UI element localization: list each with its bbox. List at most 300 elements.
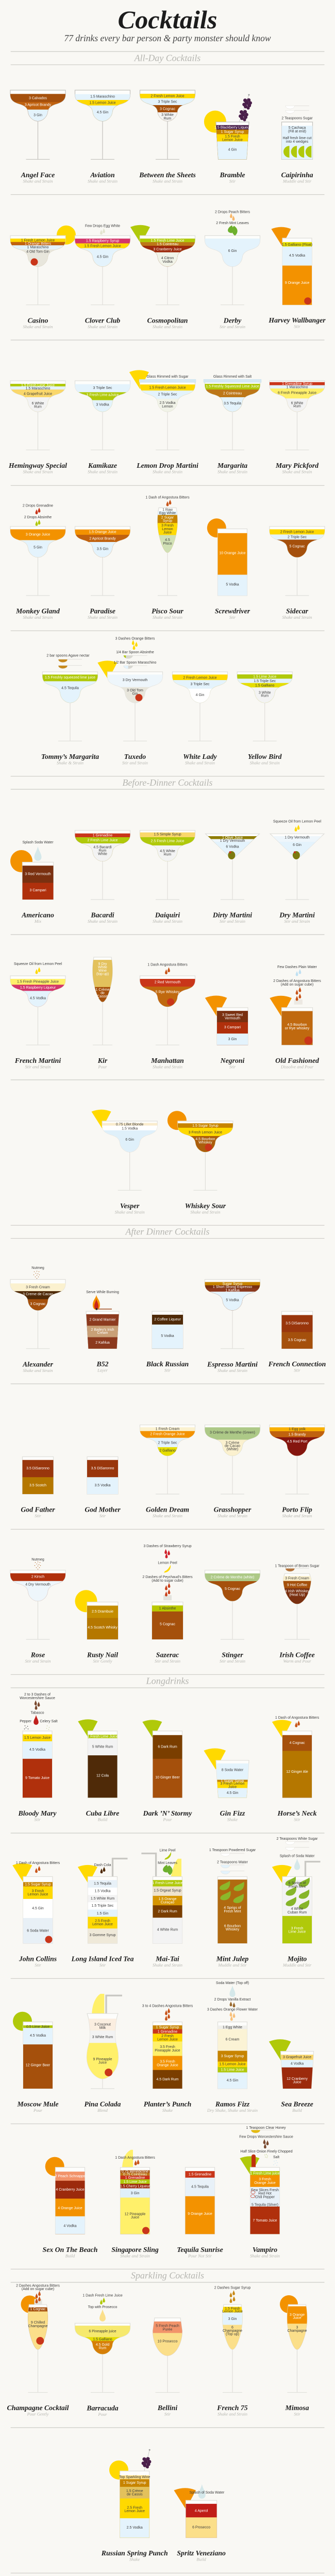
glass: Sea Breeze: 3 Grapefruit Juice [283,2056,311,2059]
glass: Cosmopolitan [139,235,195,305]
glass: Bacardi: 4.5 Bacardi [93,845,112,849]
drink: Hemingway Special [8,380,67,473]
glass: Bacardi: White [98,853,107,856]
name: Americano: Americano [21,911,54,919]
glass: Dirty Martini: 1 Dry Vermouth [220,839,245,843]
garnish: lemon wedge [272,1720,292,1739]
drink: Vesper [92,1110,166,1244]
glass: Dark 'N' Stormy: 6 Dark Rum [158,1745,177,1749]
name: Vampiro [250,2246,280,2258]
name: Mimosa [284,2404,309,2417]
name: Ramos Fizz [207,2100,258,2113]
garnish: lemon oil drops [14,962,62,974]
name: Spritz Veneziano [177,2549,226,2562]
garnish: pineapple slice and straw [92,1994,122,2013]
garnish: angostura drops [145,496,190,506]
name: Whiskey Sour: Whiskey Sour [185,1202,226,1210]
name: Kamikaze: Kamikaze [88,462,117,469]
glass: Tuxedo [99,672,171,801]
drink: Manhattan [131,963,204,1100]
name: Mary Pickford: Mary Pickford [275,462,319,469]
garnish: angostura drops [147,963,188,974]
section heading: Before-Dinner Cocktails: Before-Dinner Cocktails [123,777,212,788]
drink: Daiquiri [131,831,204,959]
name: French Connection [268,1360,326,1373]
garnish: egg white drops [85,224,120,235]
name: Between the Sheets [139,171,196,183]
drink: God Father [2,1457,74,1590]
section heading: All-Day Cocktails [11,52,324,65]
glass: French Connection: 3.5 Cognac [288,1338,307,1342]
glass: French 75: Lemon Juice [222,2310,243,2314]
name: Horse's Neck: Horse’s Neck [277,1809,317,1817]
glass: Manhattan: 2 Red Vermouth [155,980,180,984]
name: Paradise: Paradise [90,607,115,615]
glass: Mimosa: 3 [296,2326,298,2330]
glass: Dry Martini: 1 Dry Vermouth [284,836,310,839]
name: Mimosa: Mimosa [284,2404,309,2412]
glass: Margarita: 3.5 Tequila [224,402,241,405]
name: Stinger: Stinger [222,1651,243,1659]
glass: Pisco Sour: 2 Sugar [161,516,174,519]
name: Russian Spring Punch: Russian Spring Punch [101,2549,168,2557]
glass: Caipirinha: (Fill at end) [288,130,306,133]
glass: Pina Colada [66,2013,139,2156]
glass: Mary Pickford [269,380,325,450]
name: Irish Coffee [279,1651,315,1664]
garnish: nutmeg [31,1266,44,1279]
garnish: angostura drops: 1 Dash of Angostura Bitters [275,1716,320,1720]
garnish: orange wedge [205,996,227,1017]
glass: Tommy's Margarita: 1.5 Freshly squeezed lime juice [45,676,95,680]
name: Pisco Sour [152,607,183,620]
glass: Cosmopolitan: 1.5 Fresh Lime Juice [151,239,185,243]
name: Monkey Gland [15,607,60,620]
glass: Sazerac [131,1602,204,1725]
garnish: straw and lemon wedge [272,1862,321,1884]
garnish: angostura drops: 1 Dash of Angostura Bitters [16,1861,60,1865]
name: Gin Fizz [220,1809,245,1822]
name: Cuba Libre: Cuba Libre [86,1809,119,1817]
glass: Rose: 4 Dry Vermouth [25,1583,51,1587]
garnish: agave spoons: 2 bar spoons Agave nectar [46,654,90,658]
glass: Mary Pickford: 6 White [291,402,303,405]
glass: Sidecar: 2 Fresh Lemon Juice [280,531,314,534]
glass: Long Island Iced Tea: 3 Gomme Syrup [90,1934,116,1937]
glass: Casino: 1 Fresh Lemon Juice [21,239,55,242]
name: Whiskey Sour: Shake and Strain [190,1210,220,1215]
name: Cosmopolitan [147,316,188,329]
name: Sidecar: Sidecar [286,607,309,615]
garnish: honey, worcestershire, onion, salt: Salt [273,2156,279,2159]
glass: Sazerac: 1 Absinthe [159,1607,176,1611]
garnish: grenadine and absinthe drops: 2 Drops Absinthe [24,516,52,519]
glass: Angel Face: 3 Gin [34,114,42,117]
glass: Moscow Mule: 4.5 Vodka [30,2034,46,2038]
name: Screwdriver: Stir [229,615,236,620]
garnish: angostura drops [142,2004,193,2021]
glass: Old Fashioned: 4.5 Bourbon [287,1023,307,1027]
glass: Casino: 1 Orange Bitters [25,242,51,246]
name: Sazerac: Sazerac [156,1651,179,1659]
glass: Mint Julep: Fresh Mint [224,1910,241,1913]
name: Cosmopolitan: Shake and Strain [153,324,182,329]
glass: Clover Club: 1.5 Fresh Lemon Juice [84,244,121,248]
drink: Rose [2,1558,74,1694]
name: Bramble [219,171,245,183]
name: Casino: Shake and Strain [23,324,53,329]
glass: Kir: 9 Dry [98,962,107,966]
garnish: lime wedge [78,1719,97,1738]
glass: Champagne Cocktail: 9 Chilled [31,2321,45,2325]
glass: Ramos Fizz: 6 Cream [226,2038,240,2041]
garnish: bitters, absinthe and maraschino: 1/2 Bar Spoon Maraschino [114,661,157,665]
glass: Whiskey Sour: 3 Fresh Lemon Juice [189,1131,222,1134]
name: Irish Coffee: Warm and Pour [283,1658,311,1664]
glass: French 75: 1.5 Fresh [225,2307,240,2311]
glass: Screwdriver: 5 Vodka [226,583,239,586]
glass: Sazerac: 5 Cognac [160,1623,175,1626]
glass: Bacardi [66,831,139,957]
glass: Stinger: 2 Crème de Menthe (white) [211,1576,254,1580]
name: Pisco Sour: Pisco Sour [152,607,183,615]
name: Golden Dream: Shake and Strain [153,1513,182,1518]
name: Mimosa: Stir [294,2412,300,2417]
garnish: orange slice [167,1111,187,1130]
garnish: lime slice [13,2012,32,2031]
garnish: sugar spoons [281,106,313,121]
glass: Sidecar: 5 Cognac [290,545,305,549]
garnish: honey, worcestershire, onion, salt: Few Drops Worcestershire Sauce [239,2135,293,2139]
name: Vesper: Shake and Strain [115,1210,145,1215]
glass: Irish Coffee [261,1573,333,1702]
garnish: bitters, absinthe and maraschino: 1/4 Bar Spoon Absinthe [116,651,154,654]
garnish: brown sugar spoon: 1 Teaspoon of Brown Sugar [275,1564,320,1568]
garnish: brown sugar spoon [275,1564,320,1571]
glass: Negroni: 3 Gin [228,1038,237,1041]
name: Horse's Neck [277,1809,317,1822]
glass: John Collins: 3 Fresh [32,1890,44,1893]
glass: Between the Sheets [139,90,196,160]
drink: Mai-Tai [131,1849,204,2031]
garnish: angostura drops on sugar cube [16,2284,60,2304]
name: Champagne Cocktail [7,2404,69,2417]
garnish: sugar spoons and soda: 2 Teaspoons White Sugar [276,1837,318,1841]
glass: Porto Flip: 1 Egg yolk [289,1428,306,1431]
name: Bacardi: Bacardi [90,911,114,919]
name: Alexander [22,1360,54,1373]
glass: Bramble: 4 Gin [228,148,237,152]
garnish: worcestershire, tabasco, pepper, celery salt: Tabasco [30,1711,44,1715]
glass: Dark 'N' Stormy: 10 Ginger Beer [155,1776,180,1780]
drink: Yellow Bird [229,672,301,801]
garnish: nutmeg: Nutmeg [31,1266,44,1270]
name: Whiskey Sour [185,1202,226,1215]
name: Daiquiri [153,911,182,924]
garnish: lime drops and prosecco [82,2294,123,2321]
glass: Cosmopolitan: 1.5 Cointreau [157,243,178,246]
glass: Tommy's Margarita [34,672,106,794]
glass: French Martini: 4.5 Vodka [30,997,46,1001]
name: Mai-Tai [153,1955,182,1968]
glass: God Father: 3.5 DiSaronno [26,1467,49,1470]
garnish: orange wedge [270,996,292,1017]
name: Americano: Mix [34,919,41,924]
drink: Americano [2,841,74,996]
glass: Vampiro: 7 Tomato Juice [253,2219,277,2223]
name: Planter's Punch: Shake [162,2108,173,2113]
name: Kir: Pour [98,1064,107,1069]
glass: Daiquiri: Rum [164,853,172,857]
name: Bellini: Bellini [157,2404,177,2412]
name: Paradise: Shake and Strain [88,615,118,620]
name: Sex On The Beach: Build [65,2253,75,2258]
name: White Lady [183,753,217,766]
name: Clover Club: Clover Club [85,316,120,324]
name: Manhattan: Shake and Strain [153,1064,182,1070]
name: Yellow Bird: Yellow Bird [248,753,282,760]
garnish: angostura drops: 1 Dash Angostura Bitters [147,963,188,967]
glass: Mint Julep: 6 Bourbon [224,1925,241,1928]
name: Tommy's Margarita: Shake & Strain [57,760,83,766]
glass: Pina Colada: Juice [98,2061,107,2065]
glass: Cuba Libre: 1 Fresh Lime Juice [87,1735,118,1739]
glass: Screwdriver: 10 Orange Juice [219,551,246,555]
name: Kir [97,1057,108,1069]
glass: Gin Fizz: 8 Soda Water [222,1769,244,1772]
drink: Porto Flip [261,1425,333,1551]
garnish: sugar and water spoons: 2 Teaspoons Water [217,1861,248,1864]
glass: Clover Club: 4.5 Gin [97,255,108,259]
name: French 75: Shake and Strain [217,2412,247,2417]
drink: Pina Colada [66,1994,139,2156]
glass: Vampiro: Chili Pepper [255,2195,275,2199]
drink: Grasshopper [196,1425,269,1553]
glass: Monkey Gland: 5 Gin [34,546,42,549]
glass: Russian Spring Punch: 2.5 Vodka [127,2526,143,2530]
glass: Irish Coffee: 9 Hot Coffee [287,1583,307,1587]
name: Spritz Veneziano: Build [196,2557,207,2562]
garnish: lemon slice and blackberry [109,2449,151,2480]
name: God Father: God Father [21,1505,55,1514]
glass: Vampiro: Orange Juice [254,2181,276,2185]
glass: French 75: (Top up) [226,2333,239,2336]
glass: Golden Dream: 2 Galliano [159,1449,176,1452]
garnish: lemon [57,226,76,245]
glass: Gin Fizz: 1 Sugar Syrup [221,1780,244,1783]
name: Pina Colada: Blend [97,2108,108,2113]
glass: Mojito: 6 Sprigs of [289,1882,306,1885]
glass: Long Island Iced Tea: 1.5 Gin [97,1912,108,1916]
name: Harvey Wallbanger [268,316,326,329]
glass: Singapore Sling: 0.75 Cointreau [123,2173,147,2176]
garnish: lemon oil drops [273,820,322,832]
name: Dark 'N' Stormy [143,1809,192,1822]
glass: Cosmopolitan: 3 Cranberry Juice [153,248,182,251]
glass: Pisco Sour: Lemon [162,528,173,531]
glass: Aviation: 1.5 Maraschino [90,95,115,99]
glass: Manhattan: 5 Rye Whiskey [156,990,180,994]
glass: Aviation: 1.5 Lemon Juice [89,101,116,105]
name: Bacardi: Shake and Strain [88,919,118,924]
drink: Bloody Mary [1,1693,73,1872]
glass: Mai-Tai: 1.5 Orgeat Syrup [154,1889,181,1893]
glass: Mary Pickford: Rum [293,405,301,409]
glass: Between the Sheets: 3 Cognac [160,108,175,111]
garnish: angostura drops on sugar cube: 2 Dashes Angostura Bitters [16,2284,60,2288]
glass: Pisco Sour: 3 Fresh [161,524,174,528]
glass: Pisco Sour [157,507,178,596]
name: Margarita: Shake and Strain [217,469,247,474]
garnish: angostura drops [275,1716,320,1727]
drink: French Connection [261,1311,333,1446]
glass: Singapore Sling: 1.5 Lime Juice [123,2180,147,2184]
garnish: lemon wedge [12,1863,32,1882]
glass: Long Island Iced Tea: 1.5 Triple Sec [92,1904,114,1908]
drink: Dirty Martini [196,834,269,955]
drink: Irish Coffee [261,1564,333,1702]
name: Golden Dream [146,1506,189,1518]
glass: God Father: 3.5 Scotch [29,1484,46,1487]
glass: Angel Face: 3 Apricot Brandy [25,104,52,107]
glass: Stinger: 5 Cognac [225,1587,240,1591]
name: Vampiro: Shake and Strain [250,2253,280,2258]
glass: Golden Dream: 1 Fresh Cream [156,1427,180,1431]
name: Espresso Martini: Espresso Martini [207,1360,258,1368]
name: Vampiro: Vampiro [253,2246,277,2253]
glass: Horse's Neck: 12 Ginger Ale [286,1770,308,1774]
glass: Gin Fizz [196,1760,269,1901]
name: Mint Julep: Muddle and Stir [217,1962,247,1968]
glass: Mary Pickford: 1 Grenadine Syrup [282,382,312,386]
drink: Tequila Sunrise [164,2167,236,2310]
glass: Alexander: 3 Fresh Cream [26,1285,50,1289]
name: French Connection: Stir [294,1368,300,1373]
glass: Cuba Libre: 5 White Rum [92,1745,113,1749]
name: John Collins: John Collins [19,1955,57,1963]
garnish: orange slice [45,2157,64,2176]
name: Dark 'N' Stormy: Dark ’N’ Stormy [143,1809,192,1817]
garnish: straw and pineapple [141,1854,181,1876]
name: Monkey Gland: Monkey Gland [15,607,60,615]
glass: Vampiro: 3 Fresh [259,2178,271,2181]
drink: Cuba Libre [66,1719,139,1869]
drink: Screwdriver [207,518,250,619]
glass: Irish Coffee: 3 Fresh Cream [285,1577,309,1580]
glass: Pisco Sour: 4.5 [165,538,170,542]
garnish: lime wedge [142,1720,162,1739]
name: God Mother: God Mother [85,1505,121,1514]
name: Stinger [220,1651,245,1664]
glass: Planter's Punch: 3.5 Fresh [160,2045,175,2049]
glass: Cosmopolitan: Vodka [162,260,173,264]
glass: Irish Coffee: (Heat Up) [289,1593,305,1597]
name: Sidecar [282,607,312,620]
name: Dirty Martini: Stir and Strain [220,919,245,924]
name: Alexander: Shake and Strain [23,1368,53,1373]
glass: Champagne Cocktail [2,2304,74,2425]
glass: Vesper: 0.75 Lillet Blonde [116,1123,144,1126]
garnish: nutmeg: Nutmeg [31,1558,44,1562]
name: French Connection: French Connection [268,1360,326,1368]
glass: Old Fashioned: or Rye whiskey [285,1027,310,1030]
glass: Mai-Tai: Curaçao [161,1901,174,1904]
glass: Golden Dream: 2 Fresh Orange Juice [150,1433,185,1436]
glass: Moscow Mule: 12 Ginger Beer [26,2064,51,2067]
glass: Negroni: Vermouth [225,1017,240,1021]
glass: Sea Breeze: Juice [293,2080,301,2084]
glass: Mint Julep: Whiskey [226,1928,240,1931]
drink: Dry Martini [261,820,333,955]
name: Espresso Martini: Shake and Strain [217,1368,247,1373]
glass: Bacardi: 2 Fresh Lime Juice [87,839,118,842]
glass: Singapore Sling: 1 Grenadine [125,2176,145,2180]
garnish: orange wedge and soda drop [174,2484,206,2509]
glass: Kir [66,957,139,1100]
glass: Long Island Iced Tea: Lemon Juice [92,1923,113,1926]
glass: Harvey Wallbanger: 1.5 Galliano (Float) [282,243,312,247]
name: Harvey Wallbanger: Stir [294,324,300,329]
garnish: lemon wedge and straw [78,1859,128,1884]
name: Derby: Derby [223,316,242,324]
name: Pisco Sour: Shake and Strain [153,615,182,620]
name: Singapore Sling [111,2246,159,2258]
glass: Whiskey Sour [169,1121,241,1249]
garnish: bitters, absinthe and maraschino: 3 Dashes Orange Bitters [115,637,155,640]
drink: Bramble [204,94,252,182]
glass: Pisco Sour: 1 Raw [162,508,173,512]
glass: God Mother: 3.5 DiSaronno [91,1467,114,1470]
name: Hemingway Special: Shake and Strain [23,469,53,474]
glass: Yellow Bird: 3 White [259,691,271,695]
garnish: sugar spoons and soda: Splash of Soda Water [280,1855,315,1858]
glass: Barracuda: 6 Pineapple juice [89,2330,116,2333]
glass: Old Fashioned [261,1008,333,1124]
name: Grasshopper [214,1506,252,1518]
glass: Yellow Bird: 1.5 Galliano [255,684,274,688]
glass: Grasshopper: de Cacao [225,1445,240,1448]
glass: Casino [10,235,66,305]
glass: Champagne Cocktail: Champagne [28,2325,48,2328]
garnish: worcestershire, tabasco, pepper, celery salt: Worcestershire Sauce [20,1697,55,1700]
garnish: soda, vanilla, orange flower water: 3 Dashes Orange Flower Water [207,2008,258,2011]
glass: Sex On The Beach: 4 Orange Juice [58,2207,82,2210]
glass: Spritz Veneziano: 6 Prosecco [192,2526,210,2530]
garnish: worcestershire, tabasco, pepper, celery salt: Celery Salt [40,1720,58,1723]
drink: Moscow Mule [2,2012,74,2158]
garnish: sugar and water spoons: 1 Teaspoon Powdered Sugar [209,1849,256,1852]
drink: Spritz Veneziano [165,2484,238,2562]
garnish: lemon oil drops: Squeeze Oil from Lemon Peel [14,962,62,966]
name: Grasshopper: Grasshopper [214,1506,252,1514]
glass: Paradise: 2 Apricot Brandy [89,537,116,540]
name: B52: B52 [96,1360,109,1368]
glass: Paradise: 1.5 Orange Juice [89,531,116,534]
glass: Planter's Punch: 1 Grenadine [158,2030,177,2034]
glass: Between the Sheets: Rum [164,117,172,121]
drink: Ramos Fizz [196,1981,269,2185]
garnish: lime wedge [269,2039,291,2060]
glass: Dirty Martini: 6 Vodka [226,845,239,849]
glass: Hemingway Special: Rum [34,405,42,409]
garnish: cola drops: Dash Cola [94,1863,111,1867]
glass: Spritz Veneziano [165,2500,238,2538]
glass: Sidecar [269,526,325,596]
glass: Ramos Fizz: 4.5 Gin [227,2079,238,2082]
name: Negroni: Stir [229,1064,236,1069]
glass: Rusty Nail [66,1602,139,1731]
drink: Margarita [203,375,262,473]
